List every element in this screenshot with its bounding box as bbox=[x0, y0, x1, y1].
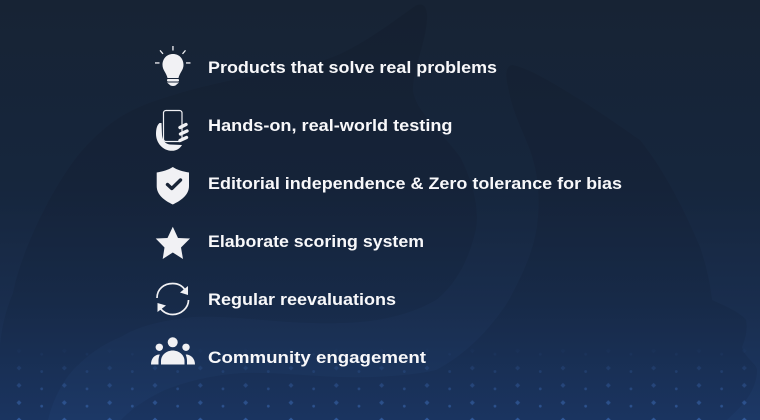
dot grid bbox=[16, 355, 747, 420]
background swoosh shape: right and lower mound bbox=[121, 65, 757, 420]
text: Community engagement: Community engagement bbox=[208, 348, 426, 367]
icon: shield with check bbox=[157, 167, 189, 204]
text: Products that solve real problems: Products that solve real problems bbox=[208, 58, 497, 77]
text: Editorial independence & Zero tolerance for bias: Editorial independence & Zero tolerance for bias bbox=[208, 174, 622, 193]
list of features bbox=[151, 46, 622, 367]
icon: community group bbox=[151, 337, 195, 364]
icon: star bbox=[156, 227, 190, 259]
icon: light bulb bbox=[155, 46, 190, 86]
icon: refresh arrows bbox=[157, 284, 188, 314]
text: Elaborate scoring system: Elaborate scoring system bbox=[208, 232, 424, 251]
text: Hands-on, real-world testing: Hands-on, real-world testing bbox=[208, 116, 452, 135]
background swoosh shape: left bbox=[0, 4, 477, 420]
text: Regular reevaluations: Regular reevaluations bbox=[208, 290, 396, 309]
icon: hand holding phone bbox=[156, 110, 187, 151]
